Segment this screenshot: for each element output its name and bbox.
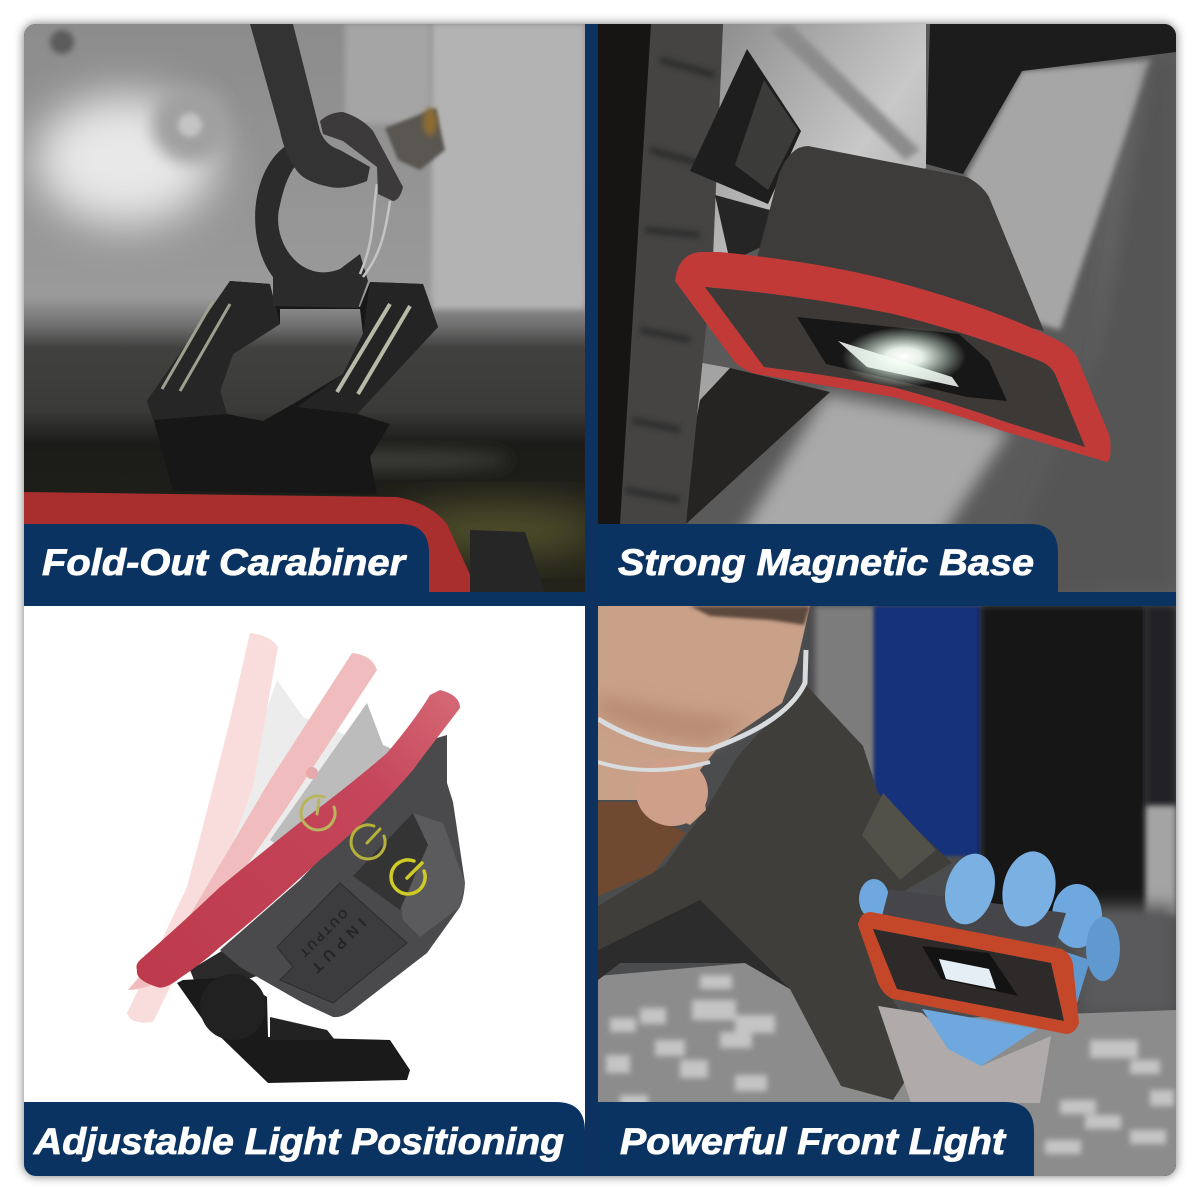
label: powerful front light: [598, 1102, 1034, 1176]
label: powerful front light: Powerful Front Light: [620, 1121, 1007, 1162]
port cover with embossed labels: INPUT: [308, 914, 369, 976]
label: fold-out carabiner: [24, 524, 429, 592]
panel: strong magnetic base: [598, 24, 1176, 600]
panel: adjustable light positioning: [24, 606, 585, 1176]
icon: lamp body: [136, 690, 465, 1083]
label: fold-out carabiner: Fold-Out Carabiner: [42, 542, 408, 583]
icon: hand and lamp: [858, 846, 1120, 1103]
icon: power buttons: [301, 796, 425, 894]
tread plate pattern: [606, 975, 1174, 1154]
label: adjustable light positioning: Adjustable Light Positioning: [33, 1121, 564, 1162]
icon: strap and carabiner: [147, 24, 438, 494]
icon: mechanic: [598, 606, 952, 1100]
label: strong magnetic base: Strong Magnetic Base: [618, 542, 1034, 583]
label: strong magnetic base: [598, 524, 1058, 592]
panel: fold-out carabiner: [24, 24, 610, 592]
label: adjustable light positioning: [24, 1102, 585, 1176]
icon: ghosted lamp positions: [127, 633, 391, 1022]
icon: magnetic lamp: [675, 49, 1111, 462]
port cover with embossed labels: OUTPUT: [297, 906, 351, 960]
icon: red lamp edge: [24, 492, 478, 592]
panel: powerful front light: [598, 606, 1176, 1176]
port cover with embossed labels: [277, 883, 407, 1003]
